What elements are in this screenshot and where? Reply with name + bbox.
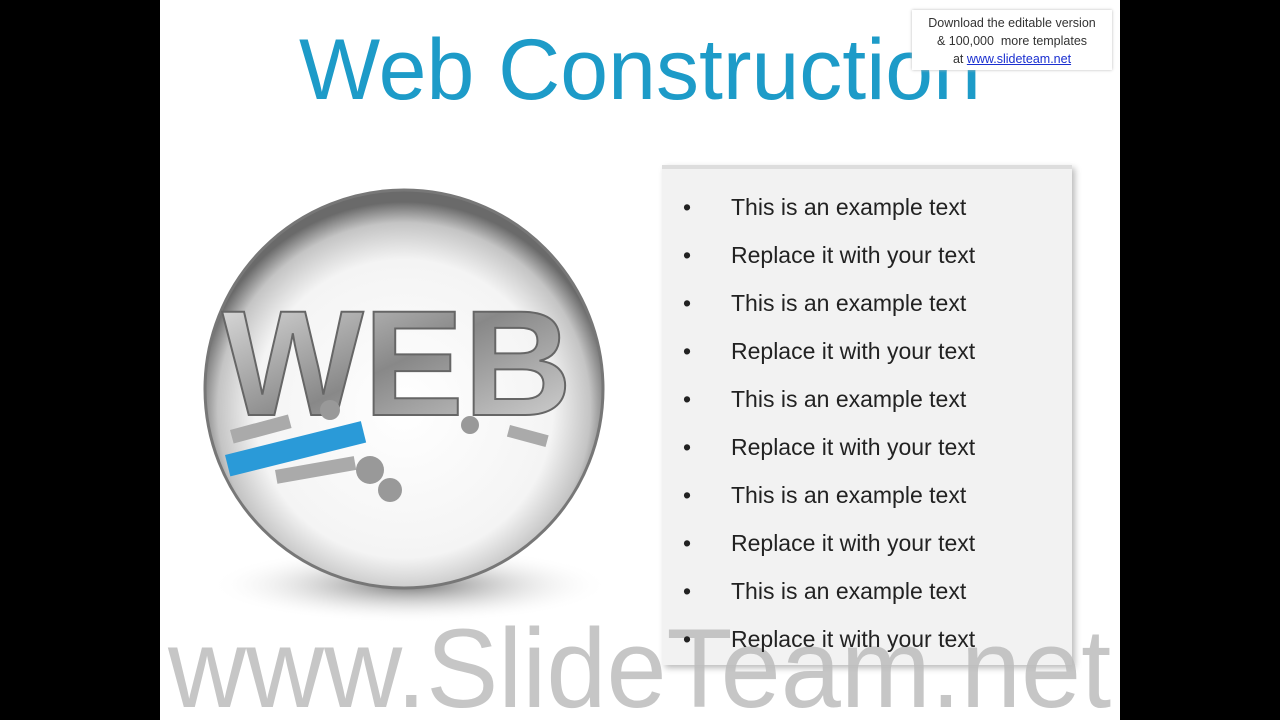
bullet list: Replace it with your text <box>731 530 975 556</box>
bullet list: • <box>683 530 691 556</box>
bullet list: Replace it with your text <box>731 242 975 268</box>
bullet list: This is an example text <box>731 482 966 508</box>
download callout: Download the editable version <box>928 16 1096 30</box>
slide <box>160 0 1120 720</box>
bullet list: • <box>683 242 691 268</box>
bullet list: • <box>683 578 691 604</box>
bullet list: • <box>683 194 691 220</box>
text panel <box>662 165 1072 665</box>
tools <box>225 421 366 476</box>
sphere image: WEB with tools <box>204 188 604 614</box>
bullet list: • <box>683 482 691 508</box>
download callout <box>912 10 1112 70</box>
bullet list: This is an example text <box>731 578 966 604</box>
bullet list: • <box>683 290 691 316</box>
download callout: at www.slideteam.net <box>953 52 1071 66</box>
bullet list: • <box>683 386 691 412</box>
bullet list: This is an example text <box>731 194 966 220</box>
bullet list: This is an example text <box>731 386 966 412</box>
bullet list: • <box>683 626 691 652</box>
bullet list: • <box>683 338 691 364</box>
bullet list: • <box>683 434 691 460</box>
download callout: & 100,000 more templates <box>937 34 1087 48</box>
bullet list: Replace it with your text <box>731 338 975 364</box>
WEB letters: WEB <box>222 279 572 447</box>
title: Web Construction <box>299 22 981 118</box>
bullet list: This is an example text <box>731 290 966 316</box>
bullet list <box>683 194 975 652</box>
bullet list: Replace it with your text <box>731 434 975 460</box>
shadow <box>210 547 610 623</box>
bullet list: Replace it with your text <box>731 626 975 652</box>
